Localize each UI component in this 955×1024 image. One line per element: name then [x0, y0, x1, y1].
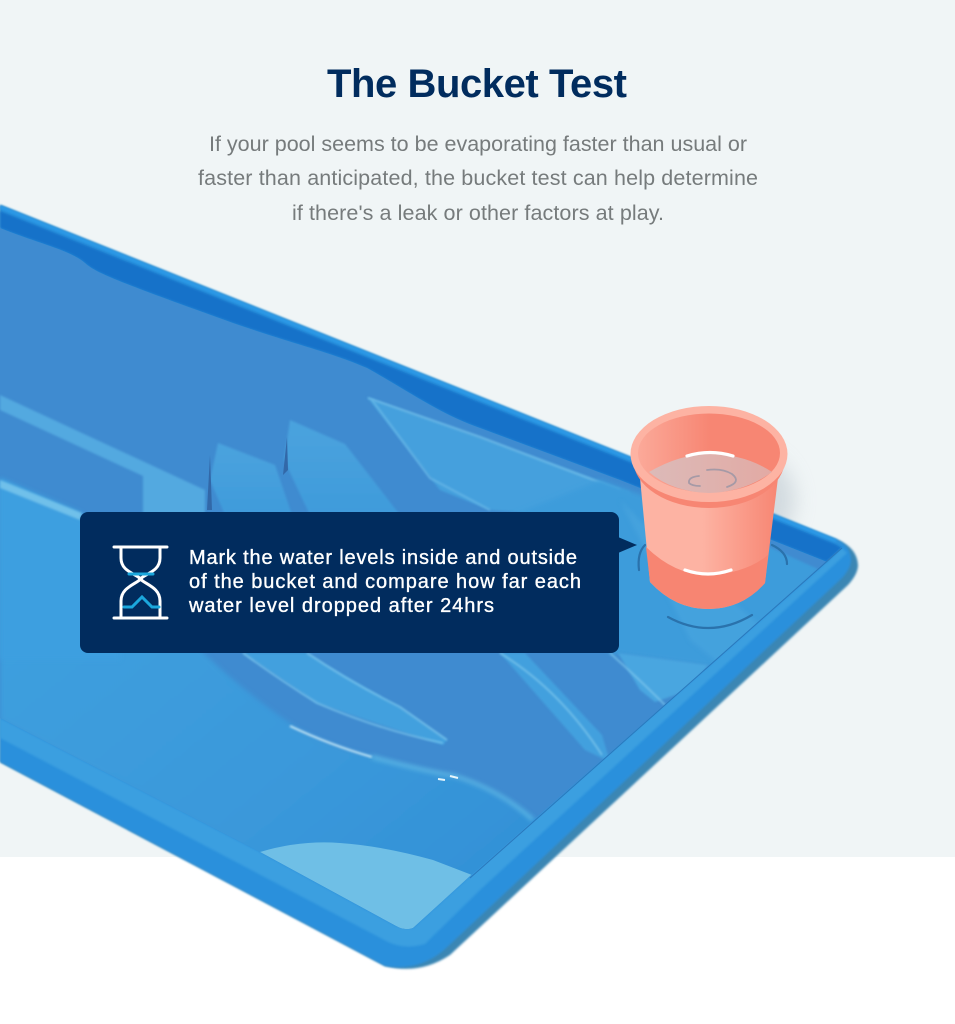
left highlight	[0, 480, 82, 520]
icon: bucket	[630, 406, 788, 609]
outer water mark	[685, 570, 731, 574]
light lower floor	[0, 479, 534, 874]
pool floor	[0, 228, 827, 929]
pool illustration	[0, 205, 858, 969]
bucket body	[640, 478, 778, 609]
floor curve highlights	[290, 726, 372, 757]
right stair stripes	[618, 653, 708, 702]
step one	[210, 443, 292, 515]
bucket inner wall	[638, 414, 780, 492]
step two	[284, 420, 400, 515]
bucket rim	[630, 406, 788, 502]
right floor area near bucket	[533, 480, 817, 666]
long leaf step	[370, 400, 594, 512]
bucket soft shadow	[695, 450, 795, 550]
step shadows	[207, 437, 288, 510]
callout box	[80, 512, 637, 653]
pool rim	[0, 205, 851, 967]
water surface	[649, 454, 772, 493]
floor features	[0, 395, 835, 930]
icon: hourglass	[114, 547, 167, 618]
pool rim outer shadow edge	[0, 205, 858, 969]
top rim bright line	[0, 207, 836, 541]
callout text	[188, 547, 581, 617]
callout pointer	[618, 537, 637, 553]
water ripples around bucket	[639, 545, 787, 628]
intro paragraph: If your pool seems to be evaporating faster than usual or	[209, 132, 747, 156]
title: The Bucket Test	[327, 62, 627, 106]
bottom rim lighter lip	[0, 548, 847, 947]
callout panel	[80, 512, 619, 653]
shallow corner patch	[260, 842, 472, 929]
bucket rim underside	[633, 410, 785, 508]
top rim dark band	[0, 211, 842, 562]
inner corner line	[470, 548, 842, 878]
callout text: Mark the water levels inside and outside	[189, 547, 577, 569]
upper left step	[0, 395, 205, 520]
leaf shape below callout	[243, 653, 447, 745]
intro paragraph: if there's a leak or other factors at play.	[292, 201, 664, 225]
water level in bucket body	[646, 547, 768, 609]
intro paragraph	[198, 132, 758, 225]
inner water mark	[687, 452, 733, 456]
callout text: water level dropped after 24hrs	[188, 595, 494, 617]
callout text: of the bucket and compare how far each	[189, 571, 581, 593]
ripple in bucket	[689, 470, 736, 487]
intro paragraph: faster than anticipated, the bucket test can help determine	[198, 166, 758, 190]
